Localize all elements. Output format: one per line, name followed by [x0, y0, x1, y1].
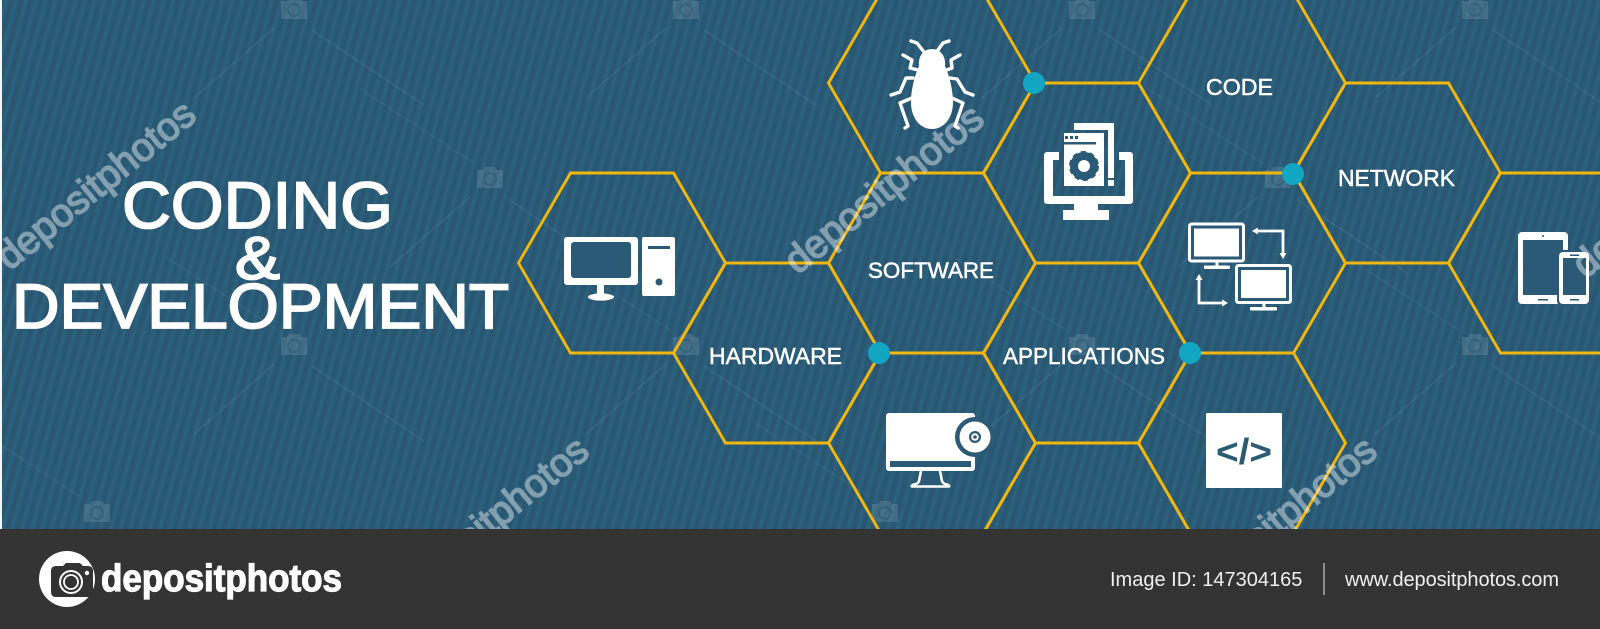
title: DEVELOPMENT: [12, 272, 509, 342]
icon: code tag: [1206, 413, 1282, 488]
image id: Image ID: 147304165: [1110, 569, 1302, 591]
divider: [1323, 563, 1325, 595]
title: &: [235, 225, 280, 292]
icon: two networked monitors: [1190, 224, 1290, 310]
website url: www.depositphotos.com: [1344, 569, 1559, 591]
node dots: [868, 72, 1304, 364]
diagonal depositphotos watermarks: depositphotos: [776, 96, 992, 282]
logo: wordmark: depositphotos: [101, 558, 342, 600]
icon: desktop computer: [564, 237, 675, 301]
title: CODING: [122, 168, 393, 242]
label: code: CODE: [1206, 74, 1273, 100]
icon: monitor with disc: [886, 413, 995, 486]
logo: camera badge: [39, 551, 95, 607]
icon: code tag: </>: [1216, 431, 1272, 472]
footer bar: [0, 529, 1600, 629]
label: hardware: HARDWARE: [709, 343, 842, 369]
hexagon network grid: [518, 0, 1600, 623]
icon: monitor with gear document: [1044, 123, 1133, 220]
icon: tablet and phone: [1518, 232, 1591, 306]
icon: bug: [891, 41, 973, 129]
label: software: SOFTWARE: [868, 258, 994, 283]
left image edge: [0, 0, 2, 529]
title: [12, 168, 509, 342]
diagonal depositphotos watermarks: depositphotos: [381, 428, 597, 614]
label: applications: APPLICATIONS: [1003, 343, 1165, 369]
label: network: NETWORK: [1338, 165, 1456, 191]
diagonal depositphotos watermarks: depositphotos: [1169, 428, 1385, 614]
